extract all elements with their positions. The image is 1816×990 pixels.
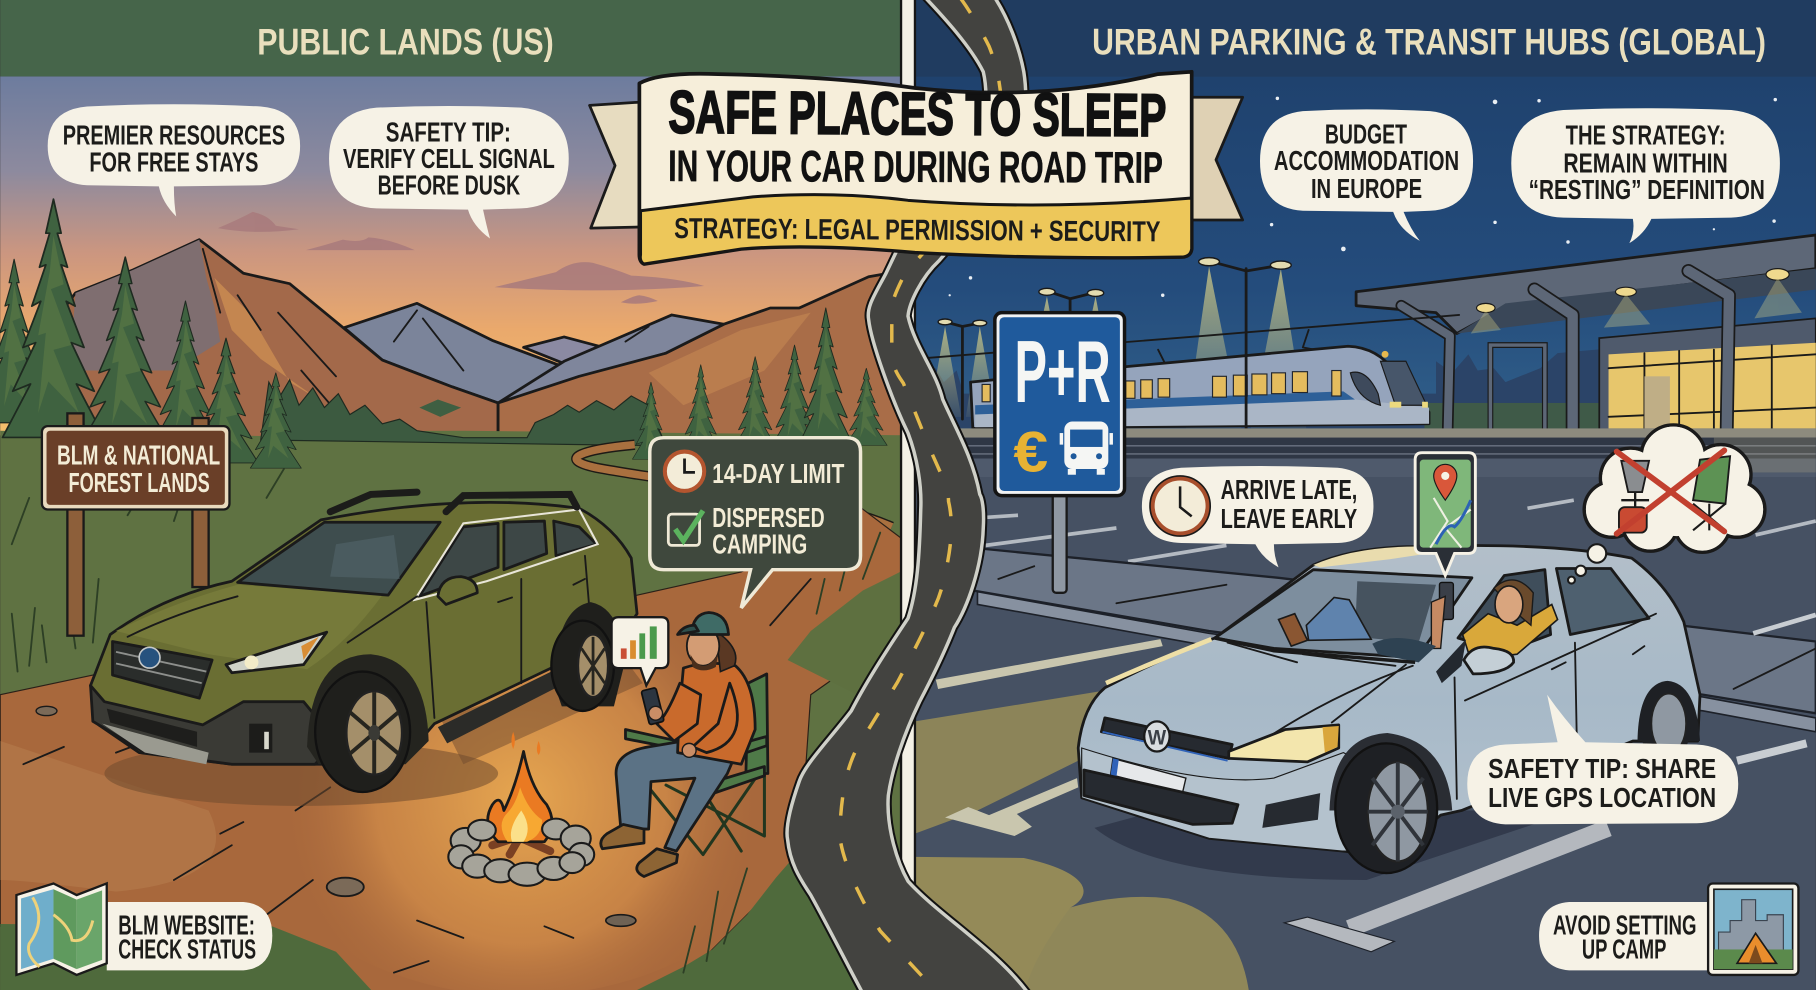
shadow [1094, 811, 1575, 880]
conifers [0, 259, 47, 423]
banner tail right [1187, 97, 1243, 220]
callout: 14-day limit and dispersed camping: 14-DAY LIMIT [712, 458, 844, 489]
callout: share live GPS location: SAFETY TIP: SHARE [1488, 753, 1716, 784]
car: silver hatchback [1078, 545, 1700, 880]
callout: avoid setting up camp: AVOID SETTING [1553, 909, 1697, 940]
callout: avoid setting up camp [1539, 902, 1714, 970]
lower sill [438, 669, 565, 743]
main title [668, 78, 1167, 193]
overhead wires [915, 315, 1459, 359]
number plate [1111, 758, 1186, 793]
distant gray mountains [344, 303, 724, 403]
center divider [900, 0, 916, 990]
distant tree row [261, 380, 666, 446]
grass corners [788, 567, 909, 724]
mirror [438, 577, 477, 604]
jeans [616, 741, 741, 851]
euro symbol: € [1013, 420, 1048, 484]
callout: premier resources [48, 104, 300, 217]
callout: BLM website check status: CHECK STATUS [118, 934, 256, 965]
P+R letters: P+R [1015, 322, 1111, 421]
thought cloud: no camp gear [1568, 425, 1765, 584]
callout: share live GPS location: LIVE GPS LOCATION [1488, 782, 1716, 813]
headers [0, 0, 1816, 76]
callout: budget accommodation: IN EUROPE [1311, 173, 1422, 204]
sign: P+R parking [995, 313, 1125, 593]
headlight glow [915, 691, 1250, 990]
lamp light cones [929, 266, 1306, 428]
cap [691, 613, 729, 635]
windshield [1215, 570, 1472, 658]
canopy roof [1356, 235, 1816, 333]
callout: budget accommodation: ACCOMMODATION [1274, 145, 1459, 176]
roof rails [330, 492, 577, 512]
winding road [787, 0, 1028, 990]
callout: BLM website check status [107, 902, 272, 970]
callout: the strategy: THE STRATEGY: [1566, 120, 1725, 151]
icon: city and tent [1708, 883, 1798, 975]
callout: BLM website check status: BLM WEBSITE: [118, 909, 255, 940]
mirror [1464, 647, 1514, 674]
clouds [218, 212, 704, 304]
callout: verify cell signal [329, 106, 569, 239]
icon: clock [1150, 476, 1210, 536]
callout: arrive late leave early: LEAVE EARLY [1221, 503, 1358, 534]
big left mountain [35, 240, 498, 446]
rear wheel [1637, 681, 1700, 764]
folding chair [1693, 456, 1730, 530]
train [971, 346, 1429, 428]
callout: verify cell signal: VERIFY CELL SIGNAL [343, 143, 555, 174]
median curb [913, 542, 1816, 713]
skyline [917, 347, 1621, 428]
chair [625, 674, 768, 855]
door lines [128, 556, 591, 718]
lamp posts [938, 258, 1291, 433]
icon: checkbox [668, 511, 703, 545]
banner body [639, 72, 1192, 264]
main title: SAFE PLACES TO SLEEP [668, 78, 1167, 149]
grille [113, 641, 212, 698]
callout: verify cell signal: SAFETY TIP: [386, 116, 511, 147]
car: green SUV [91, 492, 643, 806]
callout: share live GPS location [1467, 695, 1738, 824]
header: urban parking [913, 0, 1816, 76]
callout: premier resources: FOR FREE STAYS [89, 146, 258, 177]
boots [601, 824, 644, 849]
headlight [226, 632, 327, 673]
strategy band [640, 195, 1192, 264]
callout: 14-day limit and dispersed camping: DISPERSED [712, 502, 825, 533]
sign: BLM and National Forest lands: BLM & NATIONAL [57, 439, 220, 470]
body [1078, 545, 1700, 857]
body [91, 502, 637, 764]
sign: BLM and National Forest lands [42, 413, 229, 636]
hood highlight [1106, 639, 1211, 683]
front bumper [91, 685, 336, 764]
stars [949, 97, 1777, 297]
sign: BLM and National Forest lands: FOREST LANDS [69, 467, 210, 498]
flames [488, 751, 552, 842]
door lines [1262, 614, 1656, 799]
bumper detail [1082, 748, 1367, 851]
icon: cell signal bubble [612, 617, 668, 685]
icon: campfire [448, 732, 594, 886]
callout: arrive late leave early: ARRIVE LATE, [1221, 474, 1357, 505]
reclined passenger [1279, 582, 1453, 662]
car: silver hatchback: W [1148, 727, 1167, 750]
lower grille [1084, 770, 1238, 824]
asphalt and platform [913, 428, 1816, 990]
camp stove [1619, 461, 1649, 533]
icon: bus [1060, 421, 1113, 475]
fire ring rocks [448, 819, 594, 886]
ground [0, 431, 915, 990]
side windows [1458, 570, 1551, 652]
wipers [1228, 643, 1395, 666]
winding dirt path [576, 445, 892, 527]
head [716, 631, 736, 672]
front wheel [307, 654, 429, 792]
callout: the strategy: REMAIN WITHIN [1563, 148, 1728, 179]
person in camp chair [601, 613, 768, 877]
panel: urban parking background [913, 76, 1816, 990]
callout: budget accommodation [1260, 109, 1473, 241]
red prohibition cross [1617, 450, 1724, 534]
headlight [1229, 725, 1339, 762]
icon: phone with map pin [1415, 453, 1475, 575]
icon: clock [665, 452, 704, 491]
front wheel [1329, 733, 1452, 873]
orange sweater [678, 663, 755, 764]
station [1356, 235, 1816, 438]
windows [238, 522, 440, 595]
logs [492, 824, 550, 855]
subtitle: STRATEGY: LEGAL PERMISSION + SECURITY [674, 213, 1161, 248]
ground cracks and stones [23, 579, 811, 973]
banner tail left [590, 102, 644, 228]
grass tufts [12, 469, 880, 973]
dirt road [0, 505, 909, 990]
callout: arrive late leave early [1142, 466, 1373, 567]
grille [1101, 718, 1232, 758]
woman in window [1463, 580, 1558, 660]
callout: 14-day limit and dispersed camping [650, 438, 861, 608]
callout: verify cell signal: BEFORE DUSK [378, 170, 520, 201]
right brown mountain [498, 269, 915, 446]
main title: IN YOUR CAR DURING ROAD TRIP [668, 142, 1163, 193]
callout: the strategy [1511, 108, 1780, 243]
hands and phone [641, 688, 664, 725]
shadow [104, 741, 498, 806]
parking markings upper lot [983, 500, 1816, 562]
header: public lands: PUBLIC LANDS (US) [257, 20, 554, 62]
panel: public lands background [0, 76, 915, 990]
icon: folded map [16, 883, 107, 975]
callout: 14-day limit and dispersed camping: CAMPING [712, 528, 807, 559]
header: public lands [0, 0, 903, 76]
thought dots [1568, 544, 1606, 584]
title banner [590, 72, 1243, 264]
rear wheel [551, 602, 625, 711]
callout: premier resources: PREMIER RESOURCES [63, 120, 285, 151]
callout: budget accommodation: BUDGET [1325, 119, 1407, 150]
glass terminal [1599, 318, 1816, 438]
parking lines [936, 639, 1163, 836]
callout: avoid setting up camp: UP CAMP [1582, 934, 1666, 965]
canopy pillars [1401, 271, 1729, 435]
